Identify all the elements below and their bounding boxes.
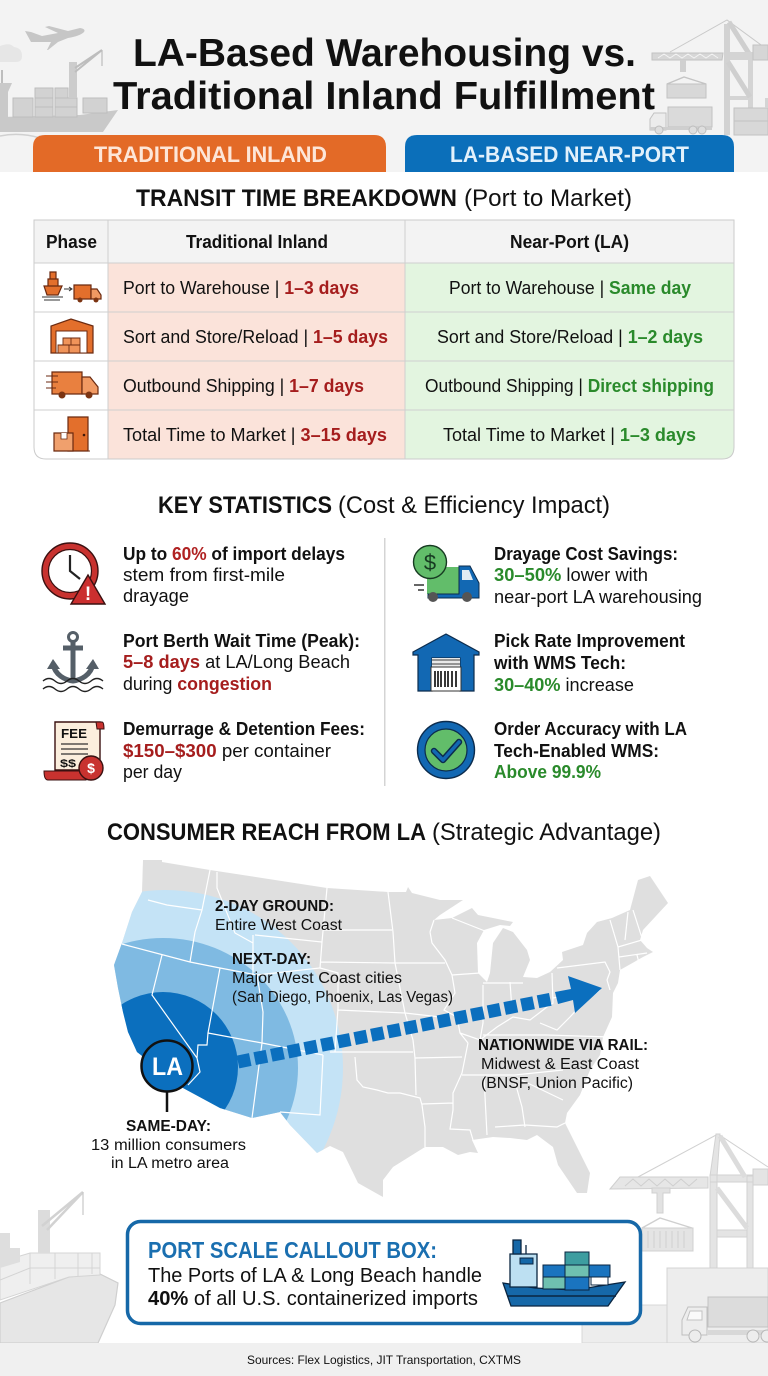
stat text: Order Accuracy with LA <box>494 719 687 739</box>
stat: drayage cost savings <box>414 544 702 607</box>
stat: order accuracy <box>418 719 687 782</box>
label: nationwide via rail: (BNSF, Union Pacific) <box>481 1075 633 1092</box>
icon: clock with warning: ! <box>85 584 91 605</box>
icon: fee scroll <box>44 722 104 780</box>
stat text: Tech-Enabled WMS: <box>494 741 659 761</box>
marker: LA pin <box>142 1040 192 1112</box>
table header row: Traditional Inland <box>186 232 328 252</box>
stat: port berth wait <box>43 631 360 694</box>
row: outbound shipping: Outbound Shipping | 1–7 days <box>123 376 364 396</box>
row: sort and store <box>51 319 703 353</box>
stat text: per day <box>123 762 182 782</box>
icon: boxes and door <box>54 417 90 451</box>
label: 2-day ground <box>215 898 343 934</box>
icon: warehouse barcode <box>413 634 479 691</box>
stat text <box>494 544 702 607</box>
label: next-day: (San Diego, Phoenix, Las Vegas) <box>232 989 453 1006</box>
icon: container ship <box>503 1240 625 1306</box>
footer: sources <box>0 1343 768 1376</box>
stat: demurrage fees <box>44 719 365 782</box>
callout text <box>148 1265 482 1310</box>
stat text: with WMS Tech: <box>493 653 626 673</box>
tab: traditional inland: TRADITIONAL INLAND <box>94 142 327 167</box>
map: consumer reach from LA <box>92 860 668 1197</box>
heading: key statistics: (Cost & Efficiency Impact) <box>338 492 610 519</box>
icon: fee scroll: $ <box>87 760 95 776</box>
stat: pick rate improvement <box>413 631 685 695</box>
panel: bottom port scene background <box>0 1134 768 1343</box>
icon: check badge <box>418 722 474 778</box>
icon: truck with dollar coin <box>414 546 479 602</box>
icon: background truck <box>682 1297 768 1342</box>
icon: clock with warning <box>42 543 105 605</box>
panel: key statistics <box>42 538 702 786</box>
icon: background crane and truck <box>650 20 768 135</box>
icon: background port buildings <box>582 1268 768 1343</box>
delivery zones <box>114 890 343 1153</box>
stat text: 30–40% increase <box>494 675 634 695</box>
label: same-day: in LA metro area <box>111 1155 229 1172</box>
row: total time to market: Total Time to Market | 3–15 days <box>123 425 387 445</box>
heading: transit time breakdown <box>136 185 632 212</box>
row: port to warehouse <box>42 272 691 302</box>
label: same-day: SAME-DAY: <box>126 1118 211 1135</box>
row: total time to market <box>54 417 696 451</box>
icon: truck with dollar coin: $ <box>424 550 436 575</box>
callout text: The Ports of LA & Long Beach handle <box>148 1265 482 1287</box>
row: port to warehouse: Port to Warehouse | Same day <box>449 278 691 298</box>
stat text: near-port LA warehousing <box>494 587 702 607</box>
label: 2-day ground: Entire West Coast <box>215 917 343 934</box>
icon: background crane <box>610 1134 768 1268</box>
stat text <box>493 631 685 695</box>
row: outbound shipping <box>46 372 714 398</box>
row: sort and store: Sort and Store/Reload | 1–5 days <box>123 327 388 347</box>
stat: first-mile drayage delays <box>42 543 345 606</box>
title: LA-Based Warehousing vs. <box>133 32 636 75</box>
stat text: 30–50% lower with <box>494 565 648 585</box>
stat text: drayage <box>123 586 189 606</box>
table header row: Phase <box>46 232 97 252</box>
stat text: Port Berth Wait Time (Peak): <box>123 631 360 651</box>
icon: fee scroll: FEE <box>61 727 87 741</box>
stat text: Above 99.9% <box>494 762 601 782</box>
label: same-day: 13 million consumers <box>91 1137 246 1154</box>
arrow: nationwide rail <box>238 976 602 1062</box>
heading: transit time breakdown: (Port to Market) <box>464 185 632 212</box>
label: next-day <box>232 951 453 1006</box>
stat text: $150–$300 per container <box>123 741 331 761</box>
stat text: Pick Rate Improvement <box>494 631 685 651</box>
state lines <box>122 870 647 1147</box>
stat text <box>123 631 360 694</box>
tab: LA-based near-port: LA-BASED NEAR-PORT <box>450 142 690 167</box>
callout text: 40% of all U.S. containerized imports <box>148 1288 478 1310</box>
label: 2-day ground: 2-DAY GROUND: <box>215 898 334 915</box>
icon: anchor <box>43 632 103 692</box>
icon: fee scroll: $$ <box>60 758 76 770</box>
icon: background plane <box>25 26 84 50</box>
icon: background ship <box>0 1192 118 1343</box>
heading: key statistics <box>158 492 610 519</box>
header background band <box>0 0 768 172</box>
stat text: stem from first-mile <box>123 565 285 585</box>
stat text <box>123 719 365 782</box>
heading: consumer reach: (Strategic Advantage) <box>432 819 661 846</box>
icon: warehouse <box>51 319 93 353</box>
heading: key statistics: KEY STATISTICS <box>158 492 332 519</box>
row: port to warehouse: Port to Warehouse | 1–3 days <box>123 278 359 298</box>
icon: background cloud <box>0 44 22 62</box>
marker: LA pin: LA <box>152 1053 183 1081</box>
stat text <box>123 544 345 606</box>
callout heading: PORT SCALE CALLOUT BOX: <box>148 1237 437 1263</box>
title <box>113 32 655 118</box>
icon: background ship and crane <box>0 50 118 141</box>
heading: transit time breakdown: TRANSIT TIME BREAKDOWN <box>136 185 457 212</box>
stat text: Demurrage & Detention Fees: <box>123 719 365 739</box>
stat text: Drayage Cost Savings: <box>494 544 678 564</box>
heading: consumer reach <box>107 819 661 846</box>
tab: LA-based near-port <box>405 135 734 172</box>
label: nationwide via rail: Midwest & East Coast <box>481 1056 640 1073</box>
stat text <box>494 719 687 782</box>
label: nationwide via rail: NATIONWIDE VIA RAIL: <box>478 1037 648 1054</box>
stat text: 5–8 days at LA/Long Beach <box>123 652 350 672</box>
row: total time to market: Total Time to Market | 1–3 days <box>443 425 696 445</box>
label: same-day <box>91 1118 246 1172</box>
icon: fast truck <box>46 372 98 398</box>
heading: consumer reach: CONSUMER REACH FROM LA <box>107 819 426 846</box>
US base map <box>114 860 668 1197</box>
label: nationwide via rail <box>478 1037 648 1092</box>
row: outbound shipping: Outbound Shipping | Direct shipping <box>425 376 714 396</box>
icon: ship to truck <box>42 272 101 302</box>
stat text: during congestion <box>123 674 272 694</box>
tab: traditional inland <box>33 135 386 172</box>
table header row: Near-Port (LA) <box>510 232 629 252</box>
panel: transit time table <box>34 220 734 459</box>
callout: port scale <box>128 1222 640 1324</box>
label: next-day: Major West Coast cities <box>232 970 402 987</box>
stat text: Up to 60% of import delays <box>123 544 345 564</box>
row: sort and store: Sort and Store/Reload | 1–2 days <box>437 327 703 347</box>
label: next-day: NEXT-DAY: <box>232 951 311 968</box>
title: Traditional Inland Fulfillment <box>113 75 655 118</box>
footer: sources: Sources: Flex Logistics, JIT Transportation, CXTMS <box>247 1353 521 1367</box>
table header row <box>46 232 629 252</box>
